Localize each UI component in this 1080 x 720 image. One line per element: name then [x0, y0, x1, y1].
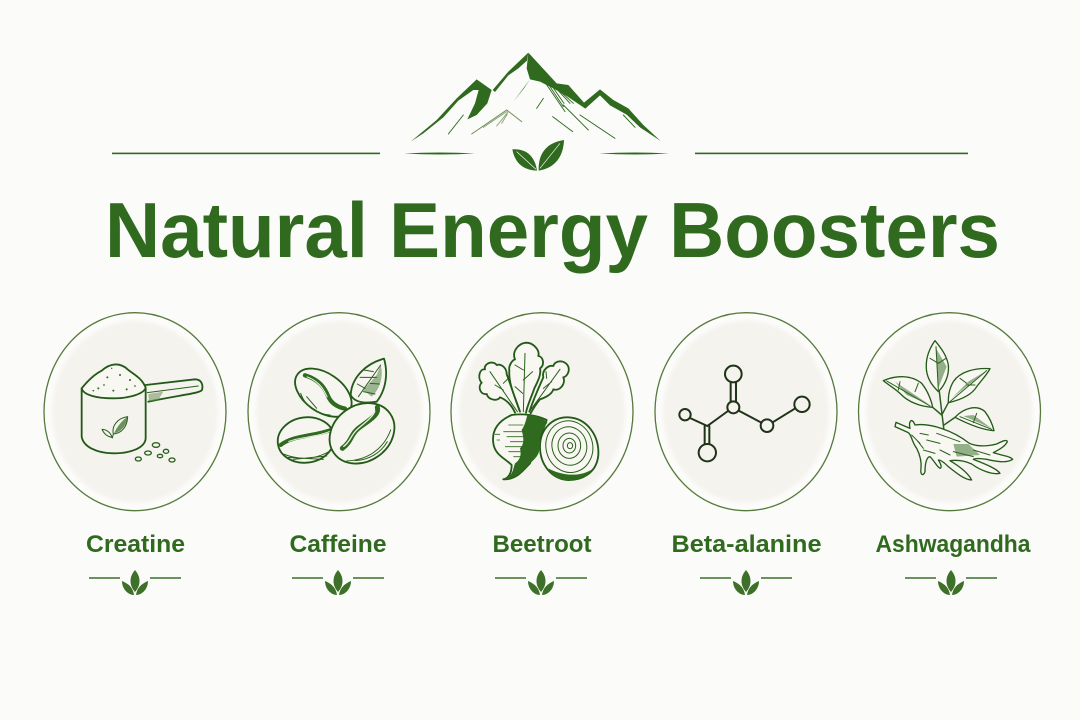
- circle: [451, 313, 633, 511]
- ornament: creatine: [89, 570, 181, 595]
- ornament: beta-alanine: [700, 570, 792, 595]
- panel: caffeine: [248, 313, 430, 511]
- divider rules: [112, 153, 968, 154]
- label: beetroot: Beetroot: [492, 531, 592, 558]
- icon: mountain: [411, 53, 661, 142]
- label: caffeine: Caffeine: [290, 531, 386, 558]
- ornament: beetroot: [495, 570, 587, 595]
- ornament: ashwagandha: [905, 570, 997, 595]
- panel: creatine: [44, 313, 226, 511]
- icon: coffee beans and leaf: [275, 359, 406, 476]
- label: ashwagandha: Ashwagandha: [876, 531, 1031, 558]
- icon: molecule: [679, 366, 810, 461]
- panel: beetroot: [451, 313, 633, 511]
- label: creatine: Creatine: [86, 531, 185, 558]
- circle: [44, 313, 226, 511]
- circle: [655, 313, 837, 511]
- circle: [248, 313, 430, 511]
- icon: header leaves: [512, 140, 564, 171]
- icon: ashwagandha plant and root: [883, 341, 1013, 480]
- title: Natural Energy Boosters: [105, 186, 1000, 274]
- panel: ashwagandha: [858, 313, 1040, 511]
- icon: scoop: [82, 364, 202, 462]
- panel: beta-alanine: [655, 313, 837, 511]
- label: beta-alanine: Beta-alanine: [672, 531, 822, 558]
- circle: [858, 313, 1040, 511]
- header emblem: mountain, rules and leaves: [112, 53, 968, 171]
- icon: beetroot: [479, 343, 599, 480]
- ornament: caffeine: [292, 570, 384, 595]
